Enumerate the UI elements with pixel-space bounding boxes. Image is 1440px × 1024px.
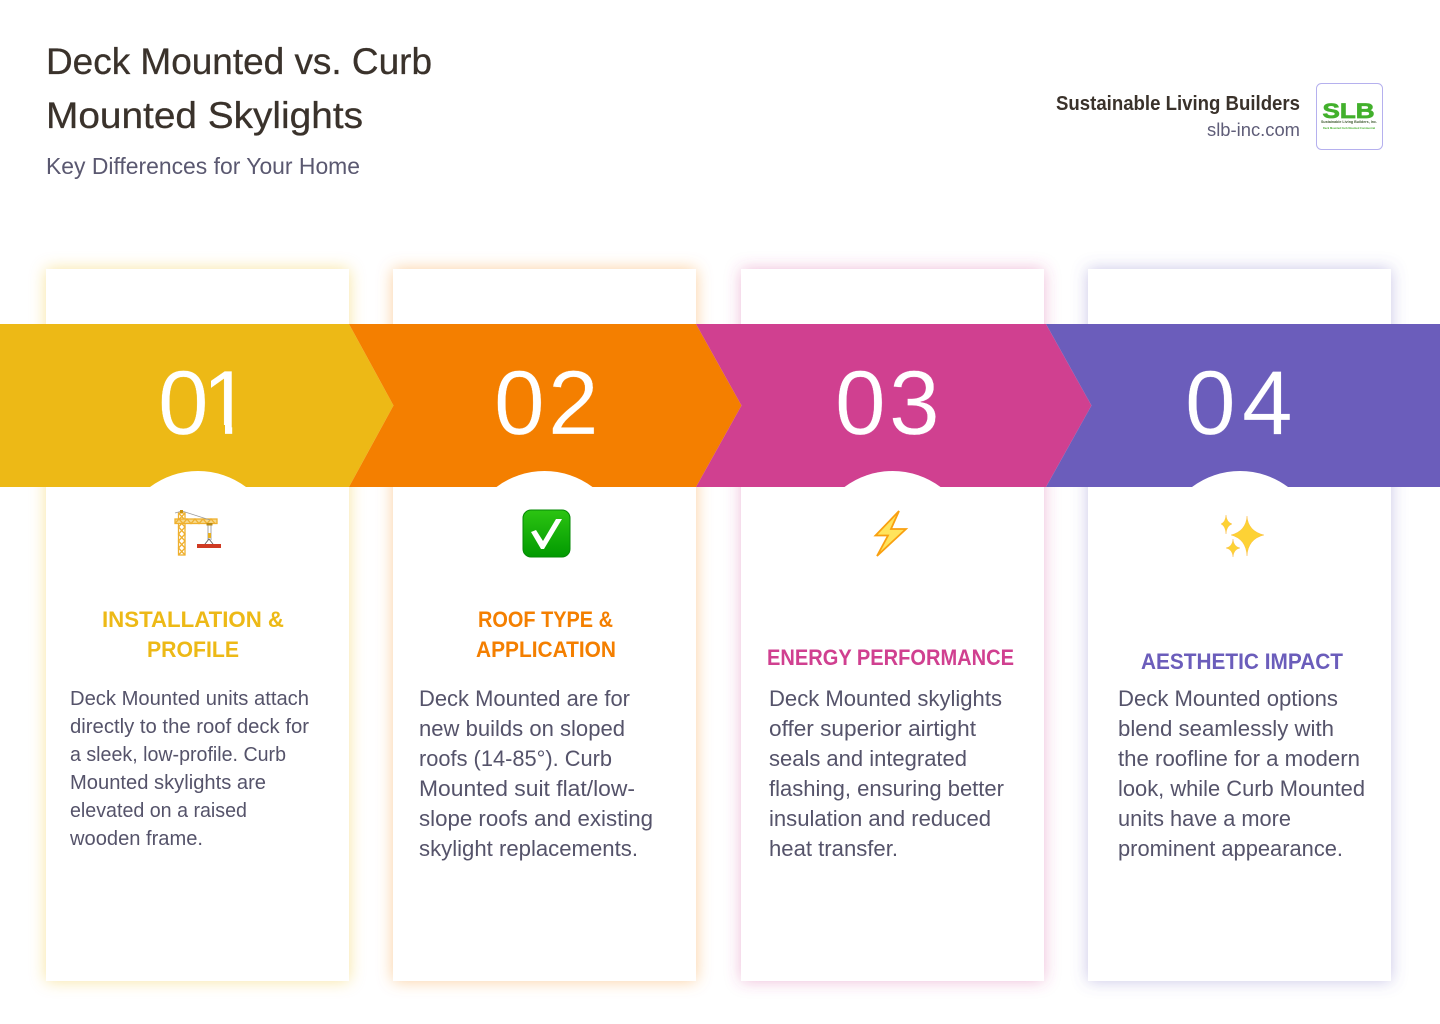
body text: Mounted suit flat/low- [419, 776, 635, 801]
body text: directly to the roof deck for [70, 716, 309, 738]
arrow 04: 04 [1185, 353, 1293, 454]
body text [1118, 686, 1365, 861]
arrow 01: 0 [158, 353, 209, 454]
arrow 02 [349, 324, 742, 487]
body text: heat transfer. [769, 836, 898, 861]
body text: Deck Mounted options [1118, 686, 1338, 711]
arrow 02: 02 [494, 353, 599, 454]
body text [419, 686, 653, 861]
heading: AESTHETIC IMPACT [1141, 649, 1344, 674]
heading: APPLICATION [476, 637, 616, 662]
arrow 03 [696, 324, 1092, 487]
body text: roofs (14-85°). Curb [419, 746, 612, 771]
brand block [1056, 84, 1382, 150]
body text: flashing, ensuring better [769, 776, 1004, 801]
card 1 content [69, 471, 309, 850]
heading [102, 607, 284, 662]
chevron band [0, 324, 1440, 487]
body text: Mounted skylights are [70, 772, 266, 794]
panel: card 2 background [393, 269, 696, 981]
body text: new builds on sloped [419, 716, 625, 741]
logo: SLB [1322, 100, 1374, 123]
arrow 03: 03 [835, 353, 940, 454]
logo [1316, 84, 1382, 150]
title: Mounted Skylights [46, 95, 363, 136]
icon: sparkles [1221, 515, 1264, 557]
company website: slb-inc.com [1207, 119, 1300, 140]
body text: insulation and reduced [769, 806, 991, 831]
heading: ENERGY PERFORMANCE [767, 645, 1014, 670]
body text: the roofline for a modern [1118, 746, 1360, 771]
logo: Deck Mounted Curb Mounted Commercial [1323, 126, 1375, 130]
logo: Sustainable Living Builders, Inc. [1321, 120, 1377, 124]
icon: check mark [523, 510, 570, 557]
heading [476, 607, 616, 662]
title: Deck Mounted vs. Curb [46, 41, 432, 82]
heading: PROFILE [147, 637, 239, 662]
body text [69, 688, 309, 850]
icon dome [844, 471, 940, 487]
company name: Sustainable Living Builders [1056, 93, 1300, 115]
icon: crane [175, 510, 221, 555]
body text: a sleek, low-profile. Curb [70, 744, 286, 766]
heading: ROOF TYPE & [478, 607, 613, 632]
card 3 content [767, 471, 1014, 861]
icon dome [1192, 471, 1288, 487]
icon: lightning bolt [876, 511, 906, 556]
body text: Deck Mounted units attach [70, 688, 309, 710]
body text: look, while Curb Mounted [1118, 776, 1365, 801]
body text: Deck Mounted are for [419, 686, 630, 711]
body text: wooden frame. [69, 828, 203, 850]
card 4 content [1118, 471, 1365, 861]
arrow 04 [1046, 324, 1440, 487]
body text: elevated on a raised [70, 800, 247, 822]
body text: prominent appearance. [1118, 836, 1343, 861]
icon dome [496, 471, 592, 487]
subtitle: Key Differences for Your Home [46, 153, 360, 179]
panel: card 1 background [46, 269, 349, 981]
arrow 01: 1 [201, 353, 252, 454]
header: title and subtitle [46, 41, 432, 179]
body text: units have a more [1118, 806, 1291, 831]
icon dome [150, 471, 246, 487]
body text: seals and integrated [769, 746, 967, 771]
arrow 01 [0, 324, 394, 487]
title [46, 41, 432, 136]
panel: card 4 background [1088, 269, 1391, 981]
body text: skylight replacements. [419, 836, 638, 861]
panel: card 3 background [741, 269, 1044, 981]
card 2 content [419, 471, 653, 861]
body text: offer superior airtight [769, 716, 977, 741]
body text: slope roofs and existing [419, 806, 653, 831]
body text: Deck Mounted skylights [769, 686, 1002, 711]
body text: blend seamlessly with [1118, 716, 1334, 741]
heading: INSTALLATION & [102, 607, 284, 632]
body text [769, 686, 1004, 861]
